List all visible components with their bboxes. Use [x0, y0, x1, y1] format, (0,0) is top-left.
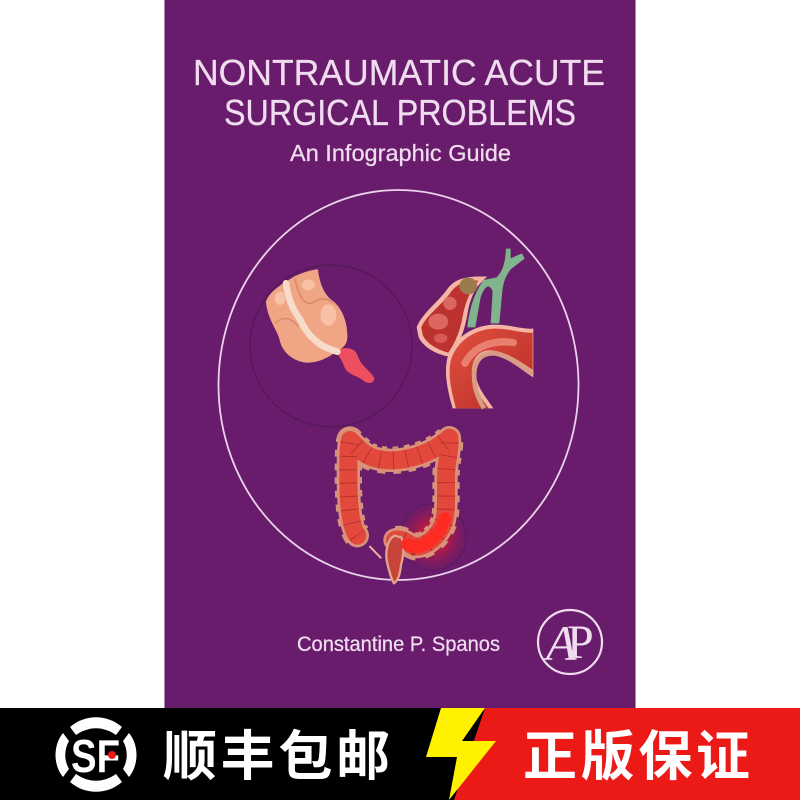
- illustration: colon: [348, 438, 450, 583]
- circle behind inflamed colon: [400, 504, 466, 570]
- publisher logo: A: [543, 615, 577, 671]
- publisher logo: [538, 610, 602, 674]
- icon: SF logo: SF: [71, 730, 120, 782]
- large ellipse frame: [218, 190, 578, 580]
- subtitle: An Infographic Guide: [290, 140, 511, 166]
- publisher logo: P: [567, 616, 594, 669]
- banner: black left: [0, 708, 800, 800]
- panel: book cover: [165, 0, 635, 708]
- banner text: free shipping: 顺丰包邮: [163, 727, 390, 787]
- banner text: authentic guarantee: 正版保证: [523, 727, 750, 787]
- illustration: gallbladder and duodenum: [417, 249, 533, 408]
- circle behind cecum: [250, 265, 412, 427]
- icon: SF logo: [56, 717, 136, 792]
- title: SURGICAL PROBLEMS: [224, 92, 576, 133]
- illustration: cecum and appendix: [266, 269, 374, 383]
- title: NONTRAUMATIC ACUTE: [193, 52, 605, 93]
- author name: Constantine P. Spanos: [297, 633, 500, 656]
- icon: lightning bolt: [426, 708, 496, 800]
- title: [193, 52, 605, 133]
- banner: red right: [454, 708, 800, 800]
